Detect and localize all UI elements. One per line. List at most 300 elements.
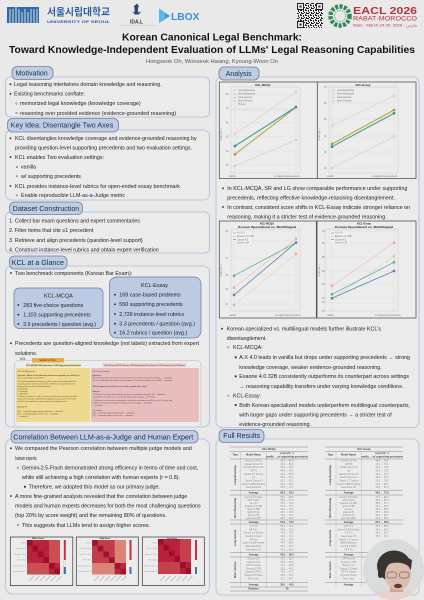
table: KCL-Essay results: Mistral Medium — [340, 542, 357, 545]
table: KCL-Essay results: 37.1 → 59.4 — [375, 496, 389, 499]
example figure: KCL question samples: ... (omitted) ... — [92, 404, 105, 407]
panel: key idea: providing question-level supporting precedents and two evaluation settings. — [15, 146, 192, 152]
panel: correlation: models and human experts decreases for both the most challenging questions — [15, 504, 201, 510]
panel: KCL at a glance: Precedents are question-aligned knowledge (not labels) extracted from expert — [15, 341, 200, 347]
table: KCL-MCQA results: GPT-4.1 — [249, 528, 259, 531]
table: KCL-MCQA results: 38.4 → 50.9 — [280, 561, 294, 564]
authors: Hongseok Oh, Wonseok Hwang, Kyoung-Woon On — [146, 59, 278, 65]
example figure: KCL question samples: D. (omitted) — [18, 392, 28, 396]
table: KCL-MCQA results: 41.9 → 66.3 — [280, 548, 294, 551]
chart: KCL-Essay Korean specialized vs multilingual: 40 — [322, 298, 325, 300]
table: KCL-Essay results: Qwen3 235B Instant — [338, 528, 360, 531]
table: KCL-MCQA results: GLM 4.5 Air — [247, 511, 260, 514]
chart: KCL-Essay: 40 — [324, 136, 327, 138]
text: korean-specialized findings: with larger gaps under supporting precedents → a stricter test of — [239, 412, 392, 418]
panel: key idea: vanilla — [21, 165, 36, 171]
table: KCL-MCQA results: Average — [249, 554, 259, 556]
table: KCL-Essay results: Average — [344, 521, 354, 524]
chart: KCL-MCQA: 70 — [226, 108, 229, 110]
heatmap: high score: Human Expert 1 — [78, 564, 91, 568]
panel: dataset construction: 3. Retrieve and align precedents (question-level support) — [9, 238, 143, 244]
table: KCL-Essay results: 43.3 → 70.6 — [375, 480, 389, 482]
text: korean-specialized findings: evidence-grounded reasoning. — [239, 422, 311, 428]
chart: KCL-MCQA: Short General — [238, 100, 253, 103]
chart: KCL-MCQA: 50 — [226, 136, 229, 138]
table: KCL-Essay results: HyperCLOVA X — [340, 574, 357, 577]
text: korean-specialized findings: Both Korean-specialized models underperform multilingual counterparts, — [239, 403, 410, 409]
chart: KCL-MCQA Korean specialized vs multilingual: Qwen3 32B — [237, 243, 249, 245]
table: KCL-Essay results: GPT-4o mini — [342, 558, 356, 560]
table: KCL-MCQA results: 43.1 → 67.5 — [280, 545, 294, 548]
table: KCL-MCQA results: 63.4 → 83.1 — [280, 476, 294, 479]
chart: KCL-MCQA Korean specialized vs multilingual: Korean Specialized vs. Multilingual — [238, 225, 296, 229]
box: KCL-Essay: 16.2 rubrics / question (avg.) — [119, 330, 188, 336]
chart: KCL-Essay: 30 — [324, 152, 327, 154]
table: KCL-MCQA results: Average — [249, 521, 259, 524]
table: KCL-Essay results: Model Name — [341, 454, 356, 456]
box: KCL-MCQA — [14, 288, 103, 328]
text: korean-specialized findings: Exaone 4.0 32B consistently outperforms its counterpart across settings — [239, 374, 409, 380]
panel: dataset construction: 2. Filter items that cite ≥1 precedent — [9, 228, 94, 234]
chart: KCL-Essay Korean specialized vs multilingual: 55 — [322, 257, 325, 259]
table: KCL-MCQA results: 46.2 → 69.3 — [280, 517, 294, 520]
chart: KCL-Essay Korean specialized vs multilingual: vanilla — [327, 315, 334, 317]
table: KCL-Essay results: 44.9 → 71.8 — [375, 473, 389, 476]
panel: motivation: memorized legal knowledge (knowledge coverage) — [20, 101, 141, 107]
table: KCL-Essay results: o4-mini — [345, 508, 353, 511]
table: KCL-MCQA results: Exaone 4.0 32B — [245, 505, 262, 508]
heatmap: whole score: Human Expert 1 — [13, 564, 26, 568]
table: KCL-MCQA results: GPT-4.1 Nano — [246, 564, 262, 567]
table: KCL-MCQA results: 49.7 → 72.8 — [280, 511, 294, 514]
heatmap: low score: Low Score — [167, 538, 178, 540]
table: KCL-Essay results: Claude 3.5 Haiku — [339, 567, 358, 570]
table: KCL-MCQA results: Gemma 3 27B — [246, 567, 262, 570]
chart: KCL-Essay Korean specialized vs multilingual: Korean Specialized vs. Multilingual — [335, 225, 393, 229]
table: KCL-MCQA results: 35.6 → 48.2 — [280, 584, 294, 586]
table: KCL-MCQA results: 34.9 → 47.0 — [280, 571, 294, 574]
table: KCL-MCQA results: Short General — [234, 561, 237, 578]
table: KCL-Essay results: Claude Opus 4.5 — [340, 466, 358, 469]
example figure: KCL question samples: 2. Whether the conclusion is grounded on the relevant precedent and the facts of the case, and — [92, 399, 172, 402]
table: KCL-MCQA results: 33.2 → 45.8 — [280, 574, 294, 577]
chart: KCL-Essay Korean specialized vs multilingual — [317, 221, 416, 318]
chart: KCL-MCQA: Human — [238, 104, 246, 106]
example figure: KCL question samples: [P1] ... (omitted) supporting precedent ... (omitted) ... — [92, 412, 137, 414]
panel: KCL at a glance — [6, 256, 210, 427]
heatmap: whole score: Whole Score — [32, 538, 45, 540]
example figure: KCL question samples: [P2] ... (omitted) holding of the court ... (omitted) ... — [92, 414, 135, 417]
example figure: KCL question samples: KCL-MCQA Example — [18, 370, 35, 373]
example figure: KCL question samples: [P1] ... (omitted) supporting precedent text ... (omitted) ... — [18, 410, 65, 413]
table: KCL-Essay results: 35.6 → 55.8 — [375, 525, 389, 528]
text: korean-specialized findings: knowledge coverage, weaker evidence-grounded reasoning. — [239, 365, 382, 371]
table: KCL-MCQA results: 39.3 → 52.4 — [280, 558, 294, 560]
chart: KCL-Essay: Long General — [337, 96, 351, 99]
table: KCL-MCQA results: 50.1 → 72.3 — [280, 525, 294, 528]
chart: KCL-MCQA Korean specialized vs multilingual: KCL-MCQA — [260, 222, 274, 226]
table: KCL-MCQA results: Gemini 2 Flash — [245, 535, 262, 538]
heatmap: low score: GPT-5 Mini — [148, 560, 158, 562]
table: KCL-MCQA results: 50.2 → 74.1 — [280, 508, 294, 511]
table: KCL-MCQA results: 64.8 → 84.1 — [280, 470, 294, 472]
table: KCL-MCQA results: Claude 3.7 Sonnet — [244, 473, 264, 476]
QR code — [297, 3, 323, 28]
table: KCL-MCQA results: Claude Sonnet 4.5 — [244, 466, 264, 469]
table: KCL-Essay results: A.X 4.0 — [345, 532, 353, 535]
table: KCL-MCQA results: 46.8 → 70.1 — [280, 535, 294, 538]
example figure: KCL question samples: KCL-Essay Example — [92, 371, 110, 373]
example figure: KCL question samples: compensation of the resulting damages. — [18, 385, 52, 388]
table: KCL-Essay results: 34.9 → 54.6 — [375, 528, 389, 531]
table: KCL-MCQA results: 45.2 → 69.4 — [280, 538, 294, 541]
table: KCL-MCQA results: DeepSeek V3 — [246, 548, 262, 551]
heatmap: whole score: Gemini 2.5 Pro — [14, 554, 26, 556]
chart: KCL-MCQA — [219, 82, 317, 178]
example figure: KCL question samples: correct according to precedent? — [18, 376, 44, 380]
chart: KCL-MCQA: Long General — [238, 96, 252, 99]
chart: KCL-MCQA Korean specialized vs multilingual: vanilla — [229, 315, 236, 317]
table: KCL-Essay results: 34.6 → 55.9 — [375, 508, 389, 511]
table: KCL-Essay results: 35.1 → 56.2 — [375, 505, 389, 508]
table: KCL-Essay results: score (%, ↑) — [375, 452, 389, 455]
text: korean-specialized findings: KCL-MCQA: — [233, 345, 263, 351]
table: KCL-Essay results: Average — [344, 584, 354, 586]
panel: dataset construction: 4. Construct instance-level rubrics and obtain expert verification — [9, 248, 159, 254]
table: KCL-MCQA results: Qwen3 235B Instant — [243, 542, 265, 545]
table: KCL-MCQA results: score (%, ↑) — [280, 452, 294, 455]
example figure: KCL question samples — [14, 357, 201, 427]
panel: analysis: Analysis — [226, 71, 252, 78]
heatmap: low score: Human Expert 1 — [144, 564, 157, 568]
table: KCL-Essay results: Exaone 4.0 32B — [340, 502, 357, 505]
logo: EACL 2026: EACL 2026 — [353, 6, 418, 17]
chart: KCL-Essay: 50 — [324, 119, 327, 121]
table: KCL-MCQA results: Model Name — [246, 454, 261, 456]
chart: KCL-MCQA Korean specialized vs multilingual: 30 — [226, 304, 229, 306]
box: KCL-MCQA: 3.9 precedents / question (avg.) — [23, 322, 96, 328]
example figure: KCL question samples: [P2] ... (omitted) holding of the court ... (omitted) ... — [18, 412, 60, 416]
text: analysis findings: In contrast, consistent score shifts in KCL-Essay indicate stronger reliance on — [227, 205, 410, 211]
chart: KCL-MCQA: Long Reasoning — [238, 90, 255, 92]
table: KCL-MCQA results: DeepSeek R1 — [246, 486, 262, 489]
table: KCL-MCQA results: 51.8 → 75.3 — [280, 505, 294, 508]
chart: KCL-Essay: Score (%, ↑) — [318, 127, 321, 140]
panel: KCL at a glance: Two benchmark components (Korean Bar Exam): — [15, 271, 132, 277]
table: KCL-Essay results: Long Reasoning — [329, 465, 332, 485]
heatmap: low score: Gemini 2.5 Pro — [145, 554, 157, 556]
table: KCL-Essay results: 47.2 → 74.1 — [375, 463, 389, 466]
heatmap: whole score: LBOX — [21, 542, 27, 544]
text: korean-specialized findings: KCL-Essay: — [233, 394, 261, 400]
chart: KCL-Essay Korean specialized vs multilingual: 70 — [322, 231, 325, 233]
example figure: KCL question samples: B. (omitted) — [18, 388, 28, 390]
table: KCL-MCQA results: 20 — [286, 588, 289, 590]
chart: KCL-MCQA: KCL-MCQA — [255, 83, 271, 87]
chart: KCL-MCQA: 40 — [226, 151, 229, 153]
panel: correlation: We compared the Pearson correlation between multiple judge models and — [15, 446, 192, 452]
chart: KCL-MCQA: Score (%, ↑) — [220, 127, 223, 140]
chart: KCL-Essay: Short General — [337, 100, 352, 103]
panel: key idea: Enable reproducible LLM-as-a-Judge metric — [21, 193, 125, 199]
table: KCL-MCQA results: Long Reasoning — [234, 465, 237, 485]
table: KCL-MCQA results: 31.7 → 44.1 — [280, 577, 294, 580]
table: KCL-Essay results: Short Reasoning — [329, 498, 332, 518]
example figure: KCL question samples: E. Where a contract is void, the parties shall restore what they received, — [18, 395, 78, 398]
panel: correlation: human experts. — [15, 456, 37, 462]
table: KCL-Essay results: Exaone 3.5 — [342, 564, 355, 567]
logo: IDA.L — [119, 4, 156, 26]
table: KCL-MCQA results: 60.3 → 79.7 — [280, 486, 294, 489]
table: KCL-MCQA results: 65.2 → 85.0 — [280, 466, 294, 469]
table: KCL-Essay results: Type — [328, 454, 334, 456]
table: KCL-Essay results — [325, 447, 404, 587]
title — [9, 32, 415, 56]
table: KCL-Essay results: 36.4 → 58.6 — [375, 499, 389, 502]
logo: University of Seoul: 서울시립대학교 — [47, 6, 110, 18]
chart: KCL-Essay Korean specialized vs multilingual: Qwen3 32B — [335, 243, 347, 245]
example figure: KCL question samples: Precedents: — [92, 409, 103, 412]
table: KCL-Essay results: GPT-5 Mini — [343, 499, 355, 502]
panel: correlation: (top 20% by score weight) and the remaining 80% of questions. — [15, 513, 167, 519]
table: KCL-MCQA results: 45.8 → 69.5 — [280, 554, 294, 556]
panel: correlation: Therefore, we adopted this model as our primary judge. — [29, 484, 160, 490]
chart: KCL-Essay Korean specialized vs multilingual: Exaone 4.0 32B — [335, 236, 352, 238]
table: KCL-Essay results: Claude 3.5 Sonnet — [339, 538, 359, 541]
example figure: KCL question samples: Person A entered a lease with Person B, and Person C later acquired the building. ... (omitted) ... — [92, 376, 174, 380]
heatmap: high score — [76, 537, 138, 586]
table: KCL-Essay results: 46.1 → 73.5 — [375, 466, 389, 469]
heatmap: high score: Gemini 2.5 Pro — [79, 554, 91, 556]
table: KCL-MCQA results: Claude Sonnet 4 — [245, 480, 263, 482]
table: KCL-MCQA results: o3 — [252, 476, 255, 479]
table: KCL-MCQA results: 55.6 → 77.9 — [280, 499, 294, 502]
title: Toward Knowledge-Independent Evaluation of LLMs' Legal Reasoning Capabilities — [9, 45, 415, 56]
table: KCL-Essay results: DeepSeek V3 — [341, 535, 357, 538]
table: KCL-Essay results: 35.8 → 57.3 — [375, 502, 389, 505]
heatmap: high score: High Score — [100, 538, 111, 540]
heatmap: low score — [142, 537, 204, 586]
table: KCL-Essay results: o3 — [347, 470, 350, 472]
heatmap: low score: Human Expert 2 — [144, 570, 157, 573]
chart: KCL-MCQA: w/ supporting precedents — [274, 175, 301, 178]
panel: correlation: Gemini-2.5-Flash demonstrated strong efficiency in terms of time and cost, — [22, 466, 198, 472]
panel: KCL at a glance: solutions. — [15, 351, 37, 357]
table: KCL-MCQA results: Claude 3.5 Sonnet — [244, 532, 264, 535]
table: KCL-Essay results: Qwen3 235B Thinking — [337, 483, 361, 486]
text: analysis findings: In KCL-MCQA, SR and LG show comparable performance under supporting — [227, 186, 407, 192]
table: KCL-MCQA results: Qwen3 32B — [247, 508, 260, 511]
table: KCL-MCQA results: Average — [249, 584, 259, 586]
table: KCL-Essay results: vanilla → w/ supporting precedents — [361, 456, 404, 458]
table: KCL-Essay results: Average — [344, 554, 354, 556]
chart: KCL-MCQA Korean specialized vs multilingual: 70 — [226, 258, 229, 260]
chart: KCL-MCQA Korean specialized vs multilingual: A.X 4.0 — [237, 232, 245, 235]
table: KCL-MCQA results — [230, 447, 309, 591]
panel: motivation: Legal reasoning intertwines domain knowledge and reasoning. — [14, 82, 162, 88]
example figure: KCL question samples: and whether the content is correctly and adequately analyzed ... (omitted) ... — [92, 396, 157, 398]
chart: KCL-Essay Korean specialized vs multilingual: 35 — [322, 302, 325, 304]
text: korean-specialized findings: Korean-specialized vs. multilingual models further illustrate KCL's — [227, 326, 381, 332]
table: KCL-Essay results: GPT-4o — [344, 548, 353, 551]
chart: KCL-Essay Korean specialized vs multilingual: A.X 4.0 — [335, 232, 343, 235]
logo: IDA.L: IDA.L — [130, 20, 143, 26]
panel: key idea — [6, 118, 210, 200]
panel: correlation: A more fine-grained analysis revealed that the correlation between judge — [15, 494, 187, 500]
example figure: KCL question samples: 1. Whether it is clearly stated that the contract is terminated under Art. 543 ... (omitted) ... — [92, 393, 167, 396]
example figure: KCL question samples: A. Party A damaged the property and the claim was brought within the — [18, 380, 76, 383]
panel: key idea: KCL enables Two evaluation settings: — [15, 155, 104, 161]
panel: full results — [216, 430, 419, 595]
example figure: KCL question samples: C. (omitted) — [18, 390, 28, 393]
table: KCL-MCQA results: Phi-4 mini — [248, 577, 259, 580]
chart: KCL-MCQA Korean specialized vs multilingual: 50 — [226, 275, 229, 277]
example figure: KCL question samples: Question: — [92, 374, 102, 377]
table: KCL-Essay results: 44.0 → 71.2 — [375, 476, 389, 479]
example figure: KCL question samples: whether the response explains the effect on the third party ... (omitted) ... — [92, 402, 154, 404]
table: KCL-MCQA results: gpt-oss-120B — [246, 517, 261, 520]
example figure: KCL question samples: KCL — [20, 357, 26, 361]
panel: full results: Full Results — [223, 433, 260, 440]
logo: LBOX: LBOX — [171, 12, 200, 23]
chart: KCL-MCQA Korean specialized vs multilingual: 80 — [226, 231, 229, 233]
logo: EACL 2026: Mars - March 24-29, 2026 - مارس — [353, 24, 417, 28]
table: KCL-Essay results: Gemma 3 27B — [341, 561, 357, 564]
logo: EACL 2026 — [330, 6, 418, 28]
heatmap: low score: LBOX — [152, 542, 158, 544]
chart: KCL-MCQA Korean specialized vs multilingual: Score (%, ↑) — [220, 263, 223, 276]
table: KCL-MCQA results: Type — [233, 454, 239, 456]
panel: correlation: while still achieving a high correlation with human experts (r = 0.8). — [22, 475, 180, 481]
chart: KCL-Essay — [317, 82, 416, 178]
table: KCL-Essay results: Long General — [329, 530, 332, 546]
table: KCL-MCQA results: GPT-4o mini — [247, 561, 261, 564]
table: KCL-MCQA results: Claude Opus 4.5 — [245, 463, 263, 466]
table: KCL-MCQA results: o4-mini — [250, 502, 258, 505]
table: KCL-MCQA results: Qwen3 7B — [248, 514, 259, 517]
table: KCL-MCQA results: 49.3 → 71.8 — [280, 528, 294, 531]
table: KCL-Essay results: KCL-Essay — [357, 448, 371, 451]
table: KCL-Essay results: 34.1 → 53.7 — [375, 532, 389, 535]
text: analysis findings — [222, 186, 410, 221]
table: KCL-MCQA results: GPT-4o — [249, 538, 258, 541]
table: KCL-Essay results: 33.5 → 52.9 — [375, 535, 389, 538]
chart: KCL-Essay: KCL-Essay — [356, 83, 371, 87]
chart: KCL-Essay: 60 — [324, 103, 327, 105]
example figure: KCL question samples: KCL-MCQA: 283 Questions, 1,103 Supporting Precedents — [26, 364, 82, 367]
chart: KCL-Essay Korean specialized vs multilingual: Claude 4.5 — [335, 239, 347, 241]
chart: KCL-Essay: 20 — [324, 168, 327, 170]
table: KCL-MCQA results: 62.7 → 82.2 — [280, 480, 294, 482]
example figure: KCL question samples: statutory period, and the court held the defendant responsible for the — [18, 382, 75, 386]
chart: KCL-Essay Korean specialized vs multilingual: KCL-Essay — [357, 222, 371, 226]
table: KCL-MCQA results: GPT-5 Mini — [248, 499, 260, 502]
text: korean-specialized findings: disentanglement. — [227, 336, 267, 342]
panel: motivation: Existing benchmarks conflate: — [14, 92, 85, 98]
heatmap: whole score: Human Expert 2 — [13, 570, 26, 573]
table: KCL-Essay results: DeepSeek R1 — [341, 486, 357, 489]
table: KCL-Essay results: 31.8 → 52.1 — [375, 517, 389, 520]
example figure: KCL question samples: Discuss whether A may assert the lease against C and what remedies are available ... (omitted) ... — [92, 379, 175, 382]
box: KCL-Essay: 2,739 instance-level rubrics — [119, 312, 184, 318]
table: KCL-Essay results: Qwen3 7B — [343, 511, 354, 514]
table: KCL-Essay results: Short General — [329, 561, 332, 578]
chart: KCL-Essay Korean specialized vs multilingual: 25 — [322, 311, 325, 313]
heatmap: whole score: GPT-5 Mini — [17, 560, 27, 562]
panel: motivation: Motivation — [16, 70, 48, 78]
chart: KCL-Essay: Short Reasoning — [337, 93, 355, 96]
table: KCL-MCQA results: 53.1 → 76.2 — [280, 502, 294, 505]
chart: KCL-MCQA: 30 — [226, 165, 229, 167]
panel: motivation — [6, 66, 210, 117]
table: KCL-MCQA results: Average — [249, 492, 259, 494]
table: KCL-Essay results: Claude 3.7 Sonnet — [339, 480, 359, 482]
speaker video thumbnail — [363, 539, 424, 600]
chart: KCL-MCQA: 60 — [226, 122, 229, 124]
table: KCL-MCQA results: 61.2 → 80.9 — [280, 483, 294, 486]
table: KCL-Essay results: Phi-4 mini — [343, 577, 354, 580]
panel: KCL at a glance: KCL at a Glance — [12, 260, 64, 267]
logo: LBOX — [159, 8, 200, 23]
logo: University of Seoul — [7, 6, 111, 24]
example figure: KCL question samples: Which judgment should the court reach regarding the claim? — [92, 385, 148, 388]
chart: KCL-Essay: vanilla — [327, 176, 334, 178]
panel: correlation: This suggests that LLMs tend to assign higher scores. — [22, 523, 150, 529]
table: KCL-Essay results: 41.8 → 68.7 — [375, 483, 389, 486]
table: KCL-MCQA results: HyperCLOVA X — [245, 571, 262, 574]
chart: KCL-MCQA Korean specialized vs multilingual — [219, 221, 316, 318]
example figure: KCL question samples: and the court shall not recognize any such restitution claim. — [18, 400, 68, 403]
table: KCL-MCQA results: Exaone 3.5 — [247, 558, 260, 560]
table: KCL-Essay results: GPT-5 — [345, 463, 353, 466]
text: analysis findings: precedents, reflecting effective knowledge-reasoning disentanglement. — [227, 196, 395, 202]
table: KCL-MCQA results: Random — [248, 588, 259, 590]
table: KCL-MCQA results: 37.1 → 49.6 — [280, 564, 294, 567]
heatmap: high score: LBOX — [86, 542, 92, 544]
heatmap: whole score: Gemini Flash — [15, 548, 26, 550]
table: KCL-MCQA results: Long General — [234, 530, 237, 546]
table: KCL-Essay results: GPT-4.1 Nano — [341, 571, 357, 574]
table: KCL-MCQA results: 47.6 → 70.9 — [280, 532, 294, 535]
chart: KCL-MCQA Korean specialized vs multilingual: Claude 4.5 — [237, 239, 249, 241]
table: KCL-MCQA results: Gemini 2.5 Pro — [246, 460, 262, 462]
title: Korean Canonical Legal Benchmark: — [122, 32, 302, 44]
table: KCL-MCQA results: GPT-5 — [250, 470, 258, 472]
panel: key idea: w/ supporting precedents — [21, 174, 81, 180]
panel: dataset construction: 1. Collect bar exam questions and expert commentaries — [9, 218, 140, 224]
table: KCL-Essay results: 44.6 → 71.6 — [375, 492, 389, 494]
logo: EACL 2026: RABAT·MOROCCO — [353, 16, 417, 22]
example figure: KCL question samples: Rubrics: — [92, 391, 101, 393]
panel: analysis — [216, 67, 419, 428]
table: KCL-MCQA results: 44.7 → 68.8 — [280, 542, 294, 545]
box: KCL-Essay: KCL-Essay — [141, 283, 168, 289]
table: KCL-Essay results: 40.5 → 67.9 — [375, 486, 389, 489]
chart: KCL-Essay: 70 — [324, 87, 327, 89]
table: KCL-Essay results: Gemini 2.5 Pro — [341, 460, 357, 462]
chart: KCL-Essay Korean specialized vs multilingual: 60 — [322, 243, 325, 245]
panel: motivation: reasoning over provided evidence (evidence-grounded reasoning) — [20, 111, 176, 117]
chart: KCL-Essay: Long Reasoning — [337, 90, 354, 92]
table: KCL-MCQA results: vanilla → w/ supporting precedents — [266, 456, 309, 458]
chart: KCL-MCQA: vanilla — [229, 176, 236, 178]
heatmap: whole score — [10, 537, 73, 586]
table: KCL-Essay results: 32.9 → 53.7 — [375, 514, 389, 517]
panel: key idea: Key Idea: Disentangle Two Axes — [11, 123, 114, 130]
table: KCL-MCQA results: A.X 4.0 — [250, 525, 258, 528]
table: KCL-MCQA results: 35.5 → 48.2 — [280, 567, 294, 570]
panel: dataset construction — [6, 202, 210, 254]
